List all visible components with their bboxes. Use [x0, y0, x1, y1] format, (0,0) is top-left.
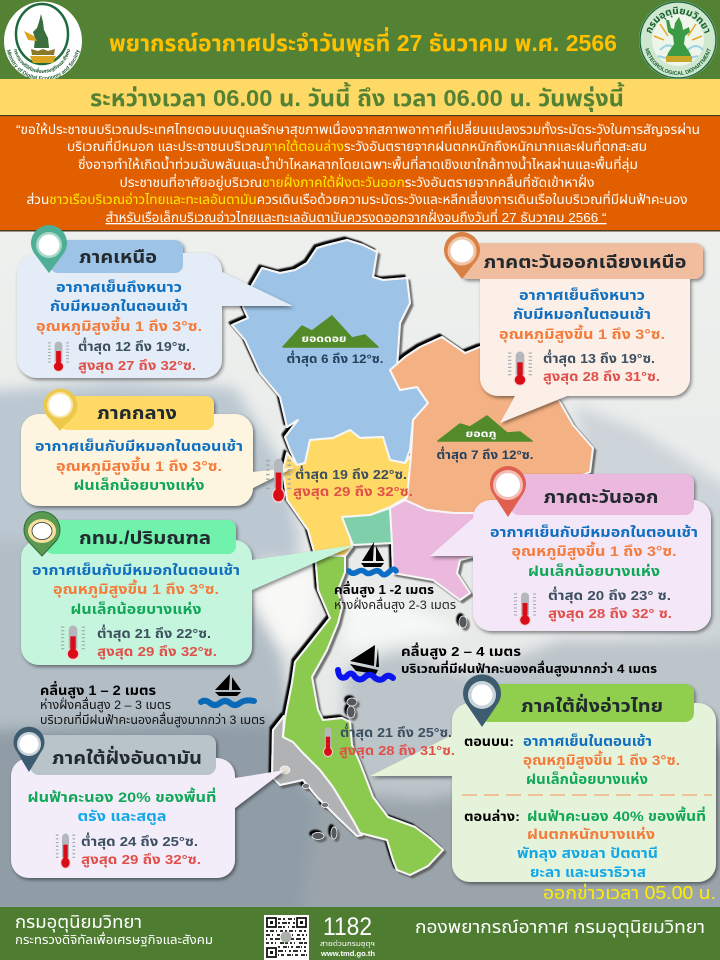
callout: central [21, 389, 413, 506]
left ministry logo: Ministry of Digital Economy and Society [6, 50, 80, 79]
callout: south Gulf of Thailand [370, 674, 716, 882]
callout: south Andaman: สูงสุด 29 ถึง 32°ซ. [81, 852, 201, 868]
callout: south Gulf of Thailand: ภาคใต้ฝั่งอ่าวไทย [521, 694, 663, 716]
region: north [232, 240, 428, 465]
mountain peak: Phu: ยอดภู [466, 429, 497, 440]
right meteorological logo: กรมอุตุนิยมวิทยา [646, 6, 710, 34]
sea state: Gulf of Thailand: คลื่นสูง 2 – 4 เมตร [401, 642, 521, 660]
footer bar: กระทรวงดิจิทัลเพื่อเศรษฐกิจและสังคม [15, 931, 213, 947]
callout: south Gulf of Thailand: ตอนบน: [464, 734, 514, 749]
callout: south Andaman [11, 727, 285, 878]
title: พยากรณ์อากาศประจำวันพุธที่ 27 ธันวาคม พ.ศ. 2566 [109, 27, 617, 57]
callout: south Andaman: ฝนฟ้าคะนอง 20% ของพื้นที่ [28, 787, 216, 805]
sea state: upper Gulf: ห่างฝั่งคลื่นสูง 2-3 เมตร [334, 596, 456, 612]
callout: south Gulf of Thailand: ฝนเล็กน้อยบางแห่ง [526, 771, 648, 787]
callout: northeast: สูงสุด 28 ถึง 31°ซ. [543, 369, 660, 385]
callout: north: ต่ำสุด 12 ถึง 19°ซ. [78, 337, 190, 354]
region: central [283, 430, 411, 556]
warning panel: บริเวณที่มีหมอก และประชาชนบริเวณ ภาคใต้ตอนล่าง ระวังอันตรายจากฝนตกหนักถึงหนักมากและฝนที่ตกสะสม [67, 137, 647, 154]
footer bar [0, 907, 720, 960]
callout: north: กับมีหมอกในตอนเช้า [50, 298, 188, 314]
region: Bangkok and vicinity [342, 508, 392, 545]
region: east [390, 500, 495, 600]
sea state: Andaman Sea: บริเวณที่มีฝนฟ้าคะนองคลื่นสูงมากกว่า 3 เมตร [40, 711, 265, 727]
map background: misty mountains [0, 231, 720, 920]
callout: east [430, 466, 711, 631]
callout: south Gulf of Thailand: อุณหภูมิสูงขึ้น 1 ถึง 3°ซ. [523, 750, 680, 770]
callout: south Gulf of Thailand: ยะลา และนราธิวาส [530, 864, 647, 880]
QR code [264, 915, 309, 960]
sea state: Andaman Sea: คลื่นสูง 1 – 2 เมตร [40, 681, 156, 700]
callout: north: อุณหภูมิสูงขึ้น 1 ถึง 3°ซ. [36, 316, 202, 336]
callout: east: อุณหภูมิสูงขึ้น 1 ถึง 3°ซ. [512, 541, 676, 561]
mountain peak: Doi [283, 316, 384, 366]
hotline [320, 913, 375, 958]
callout: Bangkok and vicinity: สูงสุด 29 ถึง 32°ซ. [97, 644, 217, 660]
callout: northeast: ต่ำสุด 13 ถึง 19°ซ. [543, 349, 655, 366]
callout: northeast: อากาศเย็นถึงหนาว [519, 287, 645, 303]
region: south [283, 552, 443, 875]
callout: northeast: ภาคตะวันออกเฉียงเหนือ [484, 252, 686, 272]
callout: central: ต่ำสุด 19 ถึง 22°ซ. [295, 465, 407, 482]
callout: central: อุณหภูมิสูงขึ้น 1 ถึง 3°ซ. [56, 456, 222, 476]
header bar [0, 0, 720, 79]
callout: east: ภาคตะวันออก [544, 487, 658, 507]
right meteorological logo: METEOROLOGICAL DEPARTMENT [645, 48, 711, 75]
callout: east: อากาศเย็นกับมีหมอกในตอนเช้า [490, 524, 698, 540]
map of Thailand [232, 240, 593, 875]
callout: east: ฝนเล็กน้อยบางแห่ง [528, 563, 660, 579]
temperature label: south on map [319, 723, 455, 759]
temperature label: south on map: สูงสุด 28 ถึง 31°ซ. [339, 743, 455, 759]
sea state: upper Gulf [334, 542, 456, 612]
callout: northeast: อุณหภูมิสูงขึ้น 1 ถึง 3°ซ. [499, 324, 665, 344]
callout: Bangkok and vicinity: ฝนเล็กน้อยบางแห่ง [70, 601, 202, 617]
warning panel: สำหรับเรือเล็กบริเวณอ่าวไทยและทะเลอันดามันควรงดออกจากฝั่งจนถึงวันที่ 27 ธันวาคม 2566 “ [106, 208, 606, 225]
callout: south Andaman: ตรัง และสตูล [78, 808, 166, 826]
callout: northeast: กับมีหมอกในตอนเช้า [513, 306, 651, 322]
time period band: ระหว่างเวลา 06.00 น. วันนี้ ถึง เวลา 06.00 น. วันพรุ่งนี้ [90, 82, 625, 112]
left ministry logo [4, 2, 82, 79]
warning panel: ส่วนชาวเรือบริเวณอ่าวไทยและทะเลอันดามัน ควรเดินเรือด้วยความระมัดระวังและหลีกเลี่ยงการเดินเรือในบริเวณที่มีฝนฟ้าคะนอง [26, 190, 688, 207]
callout: south Gulf of Thailand: ตอนล่าง: [464, 809, 520, 824]
callout: south Andaman: ภาคใต้ฝั่งอันดามัน [52, 746, 202, 768]
sea state: Andaman Sea [40, 674, 265, 727]
footer bar: กรมอุตุนิยมวิทยา [15, 912, 142, 933]
callout: south Andaman: ต่ำสุด 24 ถึง 25°ซ. [81, 832, 198, 849]
callout: south Gulf of Thailand: พัทลุง สงขลา ปัตตานี [517, 845, 658, 862]
mountain peak: Doi: ยอดดอย [302, 334, 346, 345]
warning panel: ซึ่งอาจทำให้เกิดน้ำท่วมฉับพลันและน้ำป่าไหลหลากโดยเฉพาะพื้นที่ลาดเชิงเขาใกล้ทางน้ำไหลผ่านและพื้นที่ลุ่ม [78, 155, 638, 172]
callout: Bangkok and vicinity: อากาศเย็นกับมีหมอกในตอนเช้า [32, 562, 240, 578]
warning panel: ประชาชนที่อาศัยอยู่บริเวณ ชายฝั่งภาคใต้ฝั่งตะวันออก ระวังอันตรายจากคลื่นที่ซัดเข้าหาฝั่ง [120, 173, 595, 190]
footer bar: กองพยากรณ์อากาศ กรมอุตุนิยมวิทยา [415, 917, 705, 938]
callout: north: สูงสุด 27 ถึง 32°ซ. [78, 358, 196, 374]
region: south Andaman coast [272, 716, 362, 836]
callout: central: ฝนเล็กน้อยบางแห่ง [74, 477, 204, 493]
callout: south Gulf of Thailand: อากาศเย็นในตอนเช้า [523, 733, 652, 749]
callout: east: ต่ำสุด 20 ถึง 23° ซ. [548, 586, 671, 603]
time period band [0, 79, 720, 115]
left ministry logo: กระทรวงดิจิทัลเพื่อเศรษฐกิจและสังคม [14, 49, 70, 73]
islands [280, 616, 467, 840]
callout: Bangkok and vicinity: ต่ำสุด 21 ถึง 22°ซ. [97, 624, 211, 641]
sea state: Gulf of Thailand: บริเวณที่มีฝนฟ้าคะนองคลื่นสูงมากกว่า 4 เมตร [401, 660, 657, 677]
callout: central: ภาคกลาง [97, 403, 177, 423]
sea state: Gulf of Thailand [338, 642, 657, 680]
mountain peak: Doi: ต่ำสุด 6 ถึง 12°ซ. [286, 350, 384, 366]
warning panel [0, 115, 720, 232]
callout: north: ภาคเหนือ [79, 247, 157, 267]
sea state: upper Gulf: คลื่นสูง 1 -2 เมตร [334, 581, 435, 598]
sea state: Andaman Sea: ห่างฝั่งคลื่นสูง 2 – 3 เมตร [40, 696, 171, 712]
callout: Bangkok and vicinity: กทม./ปริมณฑล [79, 528, 211, 548]
callout: north: อากาศเย็นถึงหนาว [56, 279, 182, 295]
right meteorological logo [639, 1, 717, 79]
temperature label: south on map: ต่ำสุด 21 ถึง 25°ซ. [340, 723, 452, 740]
callout: south Gulf of Thailand: ฝนฟ้าคะนอง 40% ของพื้นที่ [527, 806, 706, 824]
callout: north [17, 225, 293, 378]
issue time: ออกข่าวเวลา 05.00 น. [543, 883, 716, 903]
region: northeast [390, 337, 593, 515]
callout: central: อากาศเย็นกับมีหมอกในตอนเช้า [35, 438, 243, 454]
warning panel: “ขอให้ประชาชนบริเวณประเทศไทยตอนบนดูแลรักษาสุขภาพเนื่องจากสภาพอากาศที่เปลี่ยนแปลงรวมทั้งระมัดระวังในการสัญจรผ่าน [16, 120, 700, 137]
mountain peak: Phu: ต่ำสุด 7 ถึง 12°ซ. [436, 446, 534, 462]
callout: east: สูงสุด 28 ถึง 32° ซ. [548, 606, 672, 622]
callout: south Gulf of Thailand: ฝนตกหนักบางแห่ง [527, 826, 655, 842]
hotline: www.tmd.go.th [320, 951, 375, 958]
callout: Bangkok and vicinity [21, 512, 355, 665]
callout: northeast [444, 232, 703, 423]
hotline: 1182 [323, 913, 372, 941]
callout: Bangkok and vicinity: อุณหภูมิสูงขึ้น 1 ถึง 3°ซ. [53, 579, 219, 599]
callout: central: สูงสุด 29 ถึง 32°ซ. [293, 484, 413, 500]
hotline: สายด่วนกรมอุตุฯ [320, 939, 375, 949]
mountain peak: Phu [436, 416, 534, 462]
